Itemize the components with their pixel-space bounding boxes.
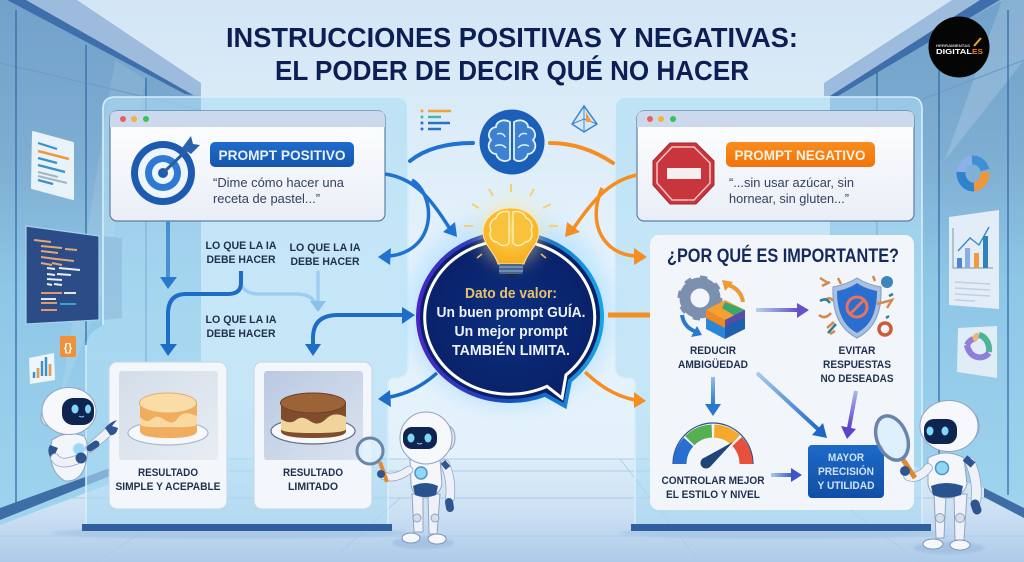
labels: lo que la IA debe hacer 2: DEBE HACER xyxy=(290,256,360,268)
arrow: positive window to labels xyxy=(378,180,429,265)
box: mayor precisión y utilidad: MAYOR xyxy=(828,452,864,464)
callout: dato de valor bubble xyxy=(406,216,614,408)
logo badge: ES xyxy=(972,47,983,56)
callout: dato de valor bubble: Dato de valor: xyxy=(465,285,557,302)
label: prompt negativo: PROMPT NEGATIVO xyxy=(734,147,866,163)
donut icon xyxy=(961,160,985,187)
arrow: positive window to bulb xyxy=(385,174,457,237)
text: resultado limitado: LIMITADO xyxy=(288,481,338,493)
text: evitar respuestas: EVITAR xyxy=(838,345,876,357)
quote: positive: receta de pastel...” xyxy=(213,191,320,206)
label: prompt positivo: PROMPT POSITIVO xyxy=(218,147,346,163)
card: resultado simple xyxy=(109,362,227,509)
code icon xyxy=(60,336,76,357)
arrow: reduce to control xyxy=(705,377,721,416)
text: reducir ambigüedad xyxy=(678,345,748,371)
icon: gear and puzzle cube xyxy=(680,278,745,339)
quote: negative: “...sin usar azúcar, sin xyxy=(729,175,854,190)
label: prompt positivo xyxy=(210,142,354,167)
arrow: reduce to avoid xyxy=(756,303,809,318)
logo badge xyxy=(928,16,990,78)
icon: list xyxy=(420,110,451,130)
arrow: negative window to why panel xyxy=(596,188,647,265)
icon: simple cake xyxy=(128,393,208,445)
window: prompt negativo xyxy=(637,111,914,221)
text: evitar respuestas xyxy=(820,345,894,385)
icon: stop sign xyxy=(653,143,714,204)
text: resultado limitado: RESULTADO xyxy=(283,467,343,479)
text: resultado limitado xyxy=(283,467,343,493)
text: reducir ambigüedad: REDUCIR xyxy=(690,345,736,357)
window: prompt positivo xyxy=(110,111,385,221)
labels: lo que la IA debe hacer 2: LO QUE LA IA xyxy=(290,242,361,254)
text: evitar respuestas: NO DESEADAS xyxy=(820,373,894,385)
arrow: control to precision xyxy=(771,468,802,482)
icon: target with arrow xyxy=(131,136,200,205)
chart card xyxy=(29,353,55,384)
text: evitar respuestas: RESPUESTAS xyxy=(823,359,891,371)
box: mayor precisión y utilidad xyxy=(808,445,884,498)
robot: right with large magnifier xyxy=(869,400,985,554)
arrow: reduce to precision xyxy=(757,373,827,438)
panel: positive glass panel xyxy=(52,97,408,539)
arrow: light branch to limited xyxy=(242,271,326,312)
labels: lo que la IA debe hacer 1: LO QUE LA IA xyxy=(206,240,277,252)
right wall floating cards xyxy=(949,160,999,378)
arrow: brain to positive panel xyxy=(410,143,473,161)
title: INSTRUCCIONES POSITIVAS Y NEGATIVAS: xyxy=(226,22,798,53)
labels: lo que la IA debe hacer 2 xyxy=(290,242,361,268)
icon: shield with scattered bits xyxy=(819,276,893,338)
arrow: avoid to precision xyxy=(841,391,856,439)
quote: negative xyxy=(729,175,854,206)
arrow: positive window down xyxy=(160,221,177,289)
labels: lo que la IA debe hacer 1 xyxy=(206,240,277,266)
panel: por qué es importante xyxy=(650,235,914,510)
icon: brain circle xyxy=(480,110,544,174)
left wall floating cards xyxy=(26,132,99,384)
labels: lo que la IA debe hacer 3: DEBE HACER xyxy=(206,328,276,340)
code panel xyxy=(26,226,99,324)
panel: negative glass panel xyxy=(615,97,940,539)
arrow: bubble to why panel xyxy=(608,307,665,324)
arrow: brain to negative panel xyxy=(550,143,613,163)
doc card xyxy=(32,132,73,199)
title: EL PODER DE DECIR QUÉ NO HACER xyxy=(275,55,749,86)
left glass building xyxy=(0,0,201,525)
label: prompt negativo xyxy=(726,142,875,167)
heading: ¿POR QUÉ ES IMPORTANTE? xyxy=(667,245,899,267)
robot: center with magnifier xyxy=(357,412,455,549)
arrow: limited to bubble xyxy=(305,307,415,356)
quote: positive: “Dime cómo hacer una xyxy=(213,175,345,190)
card: resultado limitado xyxy=(254,362,372,509)
text: controlar mejor xyxy=(662,475,765,501)
icon: gauge xyxy=(673,423,753,468)
line chart card xyxy=(949,210,999,309)
labels: lo que la IA debe hacer 1: DEBE HACER xyxy=(206,254,276,266)
quote: positive xyxy=(213,175,345,206)
logo badge: DIGITAL xyxy=(936,47,972,56)
right glass building xyxy=(824,0,1024,518)
text: resultado simple xyxy=(116,467,220,493)
icon: limited cake xyxy=(271,393,355,444)
box: mayor precisión y utilidad: PRECISIÓN xyxy=(818,465,874,478)
arrow: branch to simple result xyxy=(160,271,241,356)
arrow: negative window to bulb xyxy=(565,175,637,237)
callout: dato de valor bubble: TAMBIÉN LIMITA. xyxy=(452,342,570,359)
box: mayor precisión y utilidad: Y UTILIDAD xyxy=(818,480,875,492)
donut card xyxy=(957,326,997,378)
logo badge: HERRAMIENTAS xyxy=(936,43,970,48)
arrow: bubble lower to why panel xyxy=(585,372,646,408)
icon: pyramid xyxy=(572,106,597,132)
robot: left pointing xyxy=(41,388,118,481)
labels: lo que la IA debe hacer 3: LO QUE LA IA xyxy=(206,314,277,326)
icon: light bulb with brain xyxy=(464,184,558,278)
text: reducir ambigüedad: AMBIGÜEDAD xyxy=(678,358,748,371)
callout: dato de valor bubble: Un mejor prompt xyxy=(454,323,568,340)
text: controlar mejor: CONTROLAR MEJOR xyxy=(662,475,765,487)
text: resultado simple: RESULTADO xyxy=(138,467,198,479)
callout: dato de valor bubble: Un buen prompt GUÍA. xyxy=(436,304,586,321)
title xyxy=(226,22,798,86)
text: controlar mejor: EL ESTILO Y NIVEL xyxy=(666,489,760,501)
labels: lo que la IA debe hacer 3 xyxy=(206,314,277,340)
text: resultado simple: SIMPLE Y ACEPABLE xyxy=(116,481,220,493)
arrow: bubble to limited result xyxy=(378,373,437,407)
quote: negative: hornear, sin gluten...” xyxy=(729,191,849,206)
code icon: {} xyxy=(64,342,73,354)
